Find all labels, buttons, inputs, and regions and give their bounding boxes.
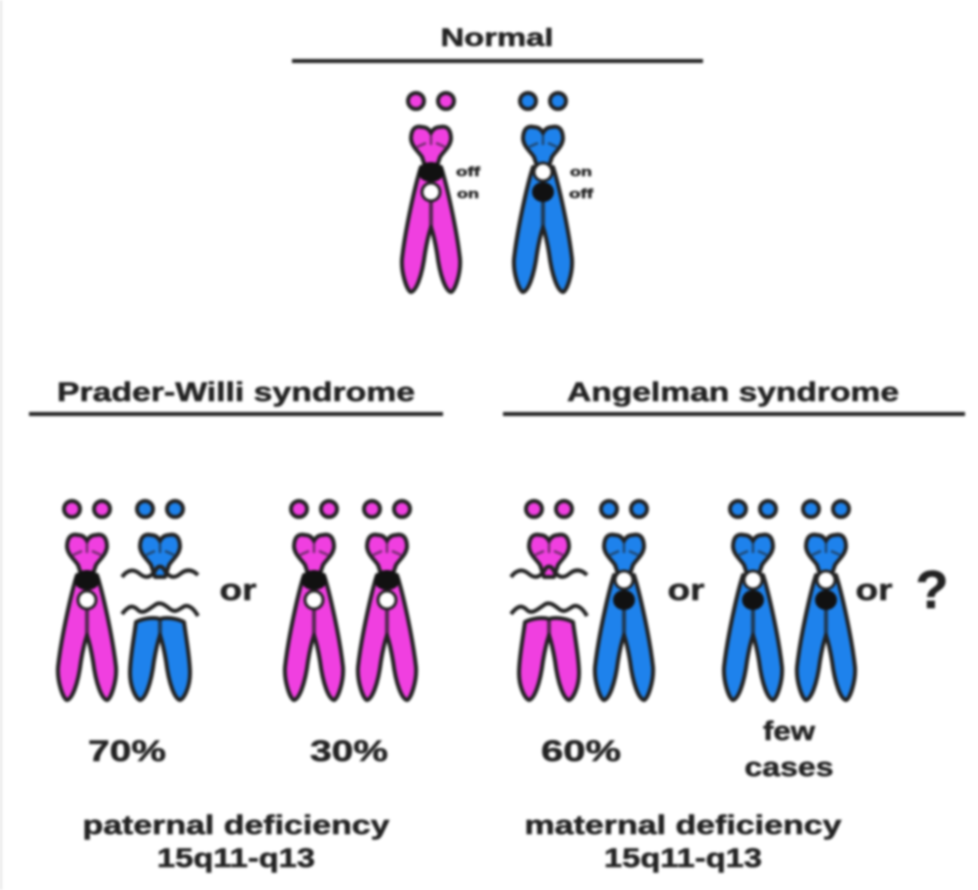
text: or: or — [856, 572, 892, 607]
chromosome: maternal — [358, 501, 416, 700]
chromosome: maternal — [285, 501, 343, 700]
value: 70%: 70% — [88, 735, 166, 768]
panel: Prader-Willi syndrome — [29, 377, 443, 873]
caption: locus: 15q11-q13 — [157, 843, 315, 873]
chromosome: paternal with deletion — [122, 501, 198, 700]
heading: Normal: Normal — [440, 24, 554, 52]
value: 30%: 30% — [310, 735, 388, 768]
value: few cases: few — [763, 716, 816, 746]
caption: paternal deficiency: paternal deficiency — [82, 810, 390, 840]
panel: Angelman syndrome — [503, 377, 965, 873]
chromosome: paternal — [595, 501, 653, 700]
heading: Angelman syndrome: Angelman syndrome — [567, 377, 899, 407]
labels: on off: on — [570, 164, 592, 179]
text: question mark: ? — [916, 560, 948, 620]
caption: maternal deficiency: maternal deficiency — [524, 810, 842, 840]
value: few cases — [744, 716, 834, 782]
panel: normal: on — [457, 186, 479, 201]
chromosome: paternal normal — [514, 93, 572, 292]
heading: Prader-Willi syndrome: Prader-Willi syndrome — [57, 377, 415, 407]
value: 60%: 60% — [541, 735, 621, 768]
chromosome: maternal with deletion — [511, 501, 587, 700]
labels: off on: off — [456, 164, 481, 179]
text: or: or — [220, 572, 256, 607]
panel: normal: off — [569, 186, 594, 201]
chromosome: maternal normal — [402, 93, 460, 292]
chromosome: paternal — [724, 501, 782, 700]
value: few cases: cases — [744, 752, 834, 782]
panel: normal — [292, 24, 703, 292]
caption: locus: 15q11-q13 — [604, 843, 762, 873]
chromosome: paternal — [797, 501, 855, 700]
text: or: or — [668, 572, 704, 607]
chromosome: maternal — [58, 501, 116, 700]
